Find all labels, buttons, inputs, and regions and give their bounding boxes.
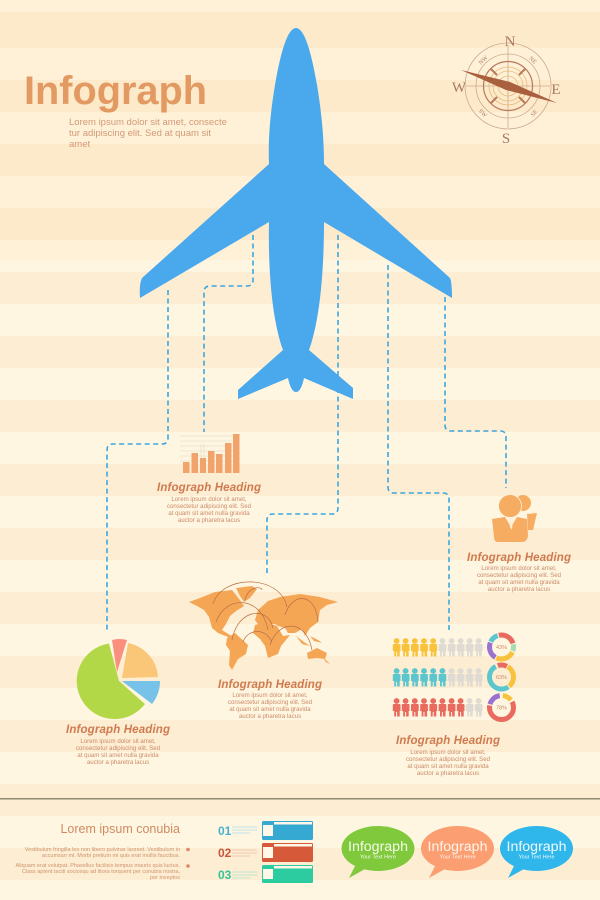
world map xyxy=(189,582,338,670)
people caption: Infograph Heading xyxy=(467,552,571,564)
footer bullet text: accumsan mi. Morbi pretium mi quis erat mollis faucibus. xyxy=(42,853,180,859)
step 01: 01 xyxy=(218,824,232,838)
pictogram caption xyxy=(396,735,500,777)
compass xyxy=(452,34,561,147)
footer bullet text: per inceptos xyxy=(150,875,180,881)
step 03 xyxy=(218,865,313,883)
map caption xyxy=(218,679,322,720)
footer bullet text: Vestibulum fringilla leo non libero pulvinar laoreet. Vestibulum in xyxy=(25,847,180,853)
step 02: 02 xyxy=(218,846,232,860)
compass: N xyxy=(505,34,516,50)
speech bubble: orange: Infograph xyxy=(428,839,487,855)
bar chart caption xyxy=(157,482,261,524)
speech bubble: blue xyxy=(500,826,573,878)
pictogram caption: Lorem ipsum dolor sit amet, xyxy=(410,749,486,756)
compass: W xyxy=(452,80,467,96)
speech bubble: orange xyxy=(421,826,494,878)
pie caption: Infograph Heading xyxy=(66,724,170,736)
bar chart caption: Lorem ipsum dolor sit amet, xyxy=(171,496,247,503)
map caption: auctor a pharetra lacus xyxy=(239,713,301,720)
pie chart xyxy=(77,639,160,719)
compass: S xyxy=(502,131,510,147)
pie caption: consectetur adipiscing elit. Sed xyxy=(76,745,160,752)
pie caption: Lorem ipsum dolor sit amet, xyxy=(80,738,156,745)
icon: business people xyxy=(492,494,537,542)
footer bullet text: Class aptent taciti sociosqu ad litora torquent per conubia nostra, xyxy=(22,869,180,875)
map caption: at quam sit amet nulla gravida xyxy=(229,706,311,713)
pictogram row: red xyxy=(393,698,482,716)
bar chart xyxy=(180,434,240,473)
people caption: consectetur adipiscing elit. Sed xyxy=(477,572,561,579)
pictogram caption: consectetur adipiscing elit. Sed xyxy=(406,756,490,763)
donut chart: 43% xyxy=(490,635,514,659)
people caption: at quam sit amet nulla gravida xyxy=(478,579,560,586)
map caption: Infograph Heading xyxy=(218,679,322,691)
step 01 xyxy=(218,821,313,840)
people caption xyxy=(467,552,571,593)
donut chart: 78% xyxy=(490,696,514,720)
pictogram row: yellow xyxy=(393,638,482,656)
airplane xyxy=(140,28,452,399)
donut chart: 78%: 78% xyxy=(496,706,507,712)
speech bubble: green xyxy=(342,826,414,878)
compass: SW xyxy=(477,108,488,119)
pie caption xyxy=(66,724,170,766)
speech bubble: green: Infograph xyxy=(348,839,408,855)
intro text xyxy=(69,117,227,150)
speech bubble: green: Your Text Here xyxy=(360,854,396,860)
donut chart: 43%: 43% xyxy=(496,645,507,651)
title: Infograph xyxy=(24,69,207,113)
bar chart caption: at quam sit amet nulla gravida xyxy=(168,510,250,517)
footer divider xyxy=(0,798,600,800)
donut chart: 63% xyxy=(490,665,514,689)
bar chart caption: consectetur adipiscing elit. Sed xyxy=(167,503,251,510)
intro text: Lorem ipsum dolor sit amet, consecte xyxy=(69,117,227,128)
speech bubble: blue: Your Text Here xyxy=(518,854,555,860)
compass: E xyxy=(551,82,561,98)
pie caption: auctor a pharetra lacus xyxy=(87,759,149,766)
bar chart caption: auctor a pharetra lacus xyxy=(178,517,240,524)
pictogram caption: at quam sit amet nulla gravida xyxy=(407,763,489,770)
pictogram row: teal xyxy=(393,668,482,686)
step 03: 03 xyxy=(218,868,232,882)
intro text: amet xyxy=(69,139,90,150)
dashed connectors xyxy=(107,235,506,630)
footer heading: Lorem ipsum conubia xyxy=(60,822,180,836)
compass: SE xyxy=(530,109,540,118)
speech bubble: blue: Infograph xyxy=(507,839,566,855)
map caption: Lorem ipsum dolor sit amet, xyxy=(232,692,308,699)
pie caption: at quam sit amet nulla gravida xyxy=(77,752,159,759)
background tint xyxy=(0,0,600,260)
step 02 xyxy=(218,843,313,862)
intro text: tur adipiscing elit. Sed at quam sit xyxy=(69,128,211,139)
speech bubble: orange: Your Text Here xyxy=(439,854,476,860)
pictogram caption: Infograph Heading xyxy=(396,735,500,747)
pictogram caption: auctor a pharetra lacus xyxy=(417,770,479,777)
people caption: Lorem ipsum dolor sit amet, xyxy=(481,565,557,572)
bar chart caption: Infograph Heading xyxy=(157,482,261,494)
people caption: auctor a pharetra lacus xyxy=(488,586,550,593)
footer bullet text: Aliquam erat volutpat. Phasellus facilisis tempus mauris quis luctus. xyxy=(16,863,180,869)
compass: NW xyxy=(478,55,490,66)
compass: NE xyxy=(527,56,537,66)
footer bullet text xyxy=(16,847,190,881)
donut chart: 63%: 63% xyxy=(496,675,507,681)
map caption: consectetur adipiscing elit. Sed xyxy=(228,699,312,706)
